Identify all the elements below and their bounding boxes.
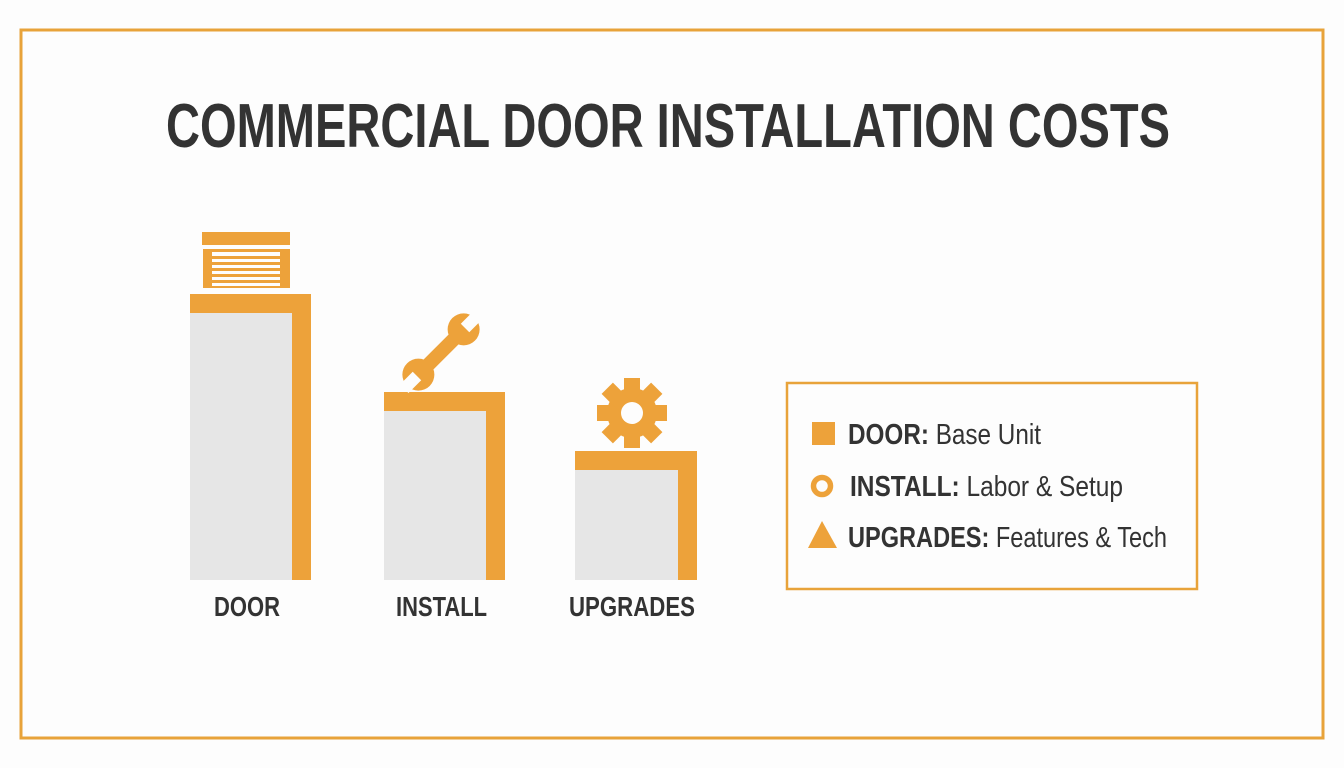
label: install: INSTALL xyxy=(396,591,487,622)
bar: door xyxy=(190,294,311,580)
label: upgrades: UPGRADES xyxy=(569,591,695,622)
bar: install xyxy=(384,392,505,580)
legend xyxy=(787,383,1197,589)
icon: gear xyxy=(597,378,667,448)
bar chart xyxy=(190,232,697,622)
bar: upgrades xyxy=(575,451,697,580)
icon: door xyxy=(202,232,290,288)
legend item: install: INSTALL: Labor & Setup xyxy=(850,471,1123,503)
label: door: DOOR xyxy=(214,591,280,622)
icon: wrench xyxy=(393,304,489,400)
legend item: door: DOOR: Base Unit xyxy=(848,419,1041,451)
legend item: upgrades: UPGRADES: Features & Tech xyxy=(848,522,1167,554)
